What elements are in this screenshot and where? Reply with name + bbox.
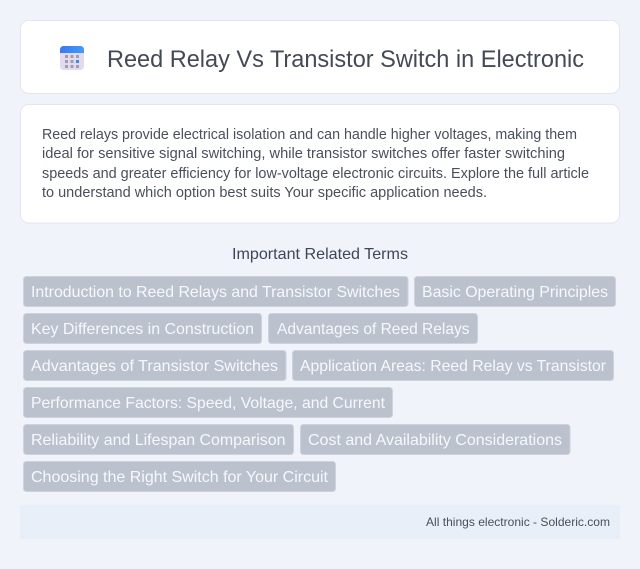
panel: title header (20, 20, 620, 94)
tag: cost (300, 424, 570, 454)
footer: All things electronic - Solderic.com (426, 515, 610, 529)
text block: summary paragraph: speeds and greater efficiency for low-voltage electronic circuits. Explore the full article (42, 166, 589, 182)
tag: construction (24, 314, 262, 344)
tag: performance factors: Performance Factors: Speed, Voltage, and Current (31, 395, 386, 412)
tag: reliability: Reliability and Lifespan Comparison (31, 432, 286, 449)
text block: summary paragraph: ideal for sensitive signal switching, while transistor switches offer faster switching (42, 146, 565, 162)
tag: introduction: Introduction to Reed Relays and Transistor Switches (31, 284, 400, 301)
tag: operating principles: Basic Operating Principles (422, 284, 608, 301)
tag: reliability (24, 424, 294, 454)
tag: operating principles (414, 276, 616, 306)
tag: application areas (292, 350, 614, 380)
footer (20, 505, 620, 539)
tag: transistor advantages: Advantages of Transistor Switches (31, 358, 278, 375)
text block: summary paragraph (42, 127, 589, 201)
tag: application areas: Application Areas: Reed Relay vs Transistor (300, 358, 607, 375)
text block: summary paragraph: Reed relays provide electrical isolation and can handle higher voltages, making them (42, 127, 577, 143)
text block: summary paragraph: to understand which option best suits Your specific application needs. (42, 185, 487, 201)
title: Reed Relay Vs Transistor Switch in Electronic (107, 46, 584, 73)
tag: transistor advantages (24, 350, 286, 380)
tag: reed relay advantages: Advantages of Reed Relays (277, 321, 470, 338)
tag: cost: Cost and Availability Considerations (308, 432, 562, 449)
tag: reed relay advantages (268, 314, 478, 344)
tag: choosing: Choosing the Right Switch for Your Circuit (31, 469, 329, 486)
panel: summary (20, 104, 620, 223)
tag: construction: Key Differences in Construction (31, 321, 254, 338)
heading: related terms: Important Related Terms (232, 246, 408, 263)
tag: performance factors (24, 388, 392, 418)
tag: introduction (24, 276, 408, 306)
icon: calendar (60, 46, 84, 70)
tag: choosing (24, 462, 336, 492)
panel: term tags (24, 276, 616, 492)
